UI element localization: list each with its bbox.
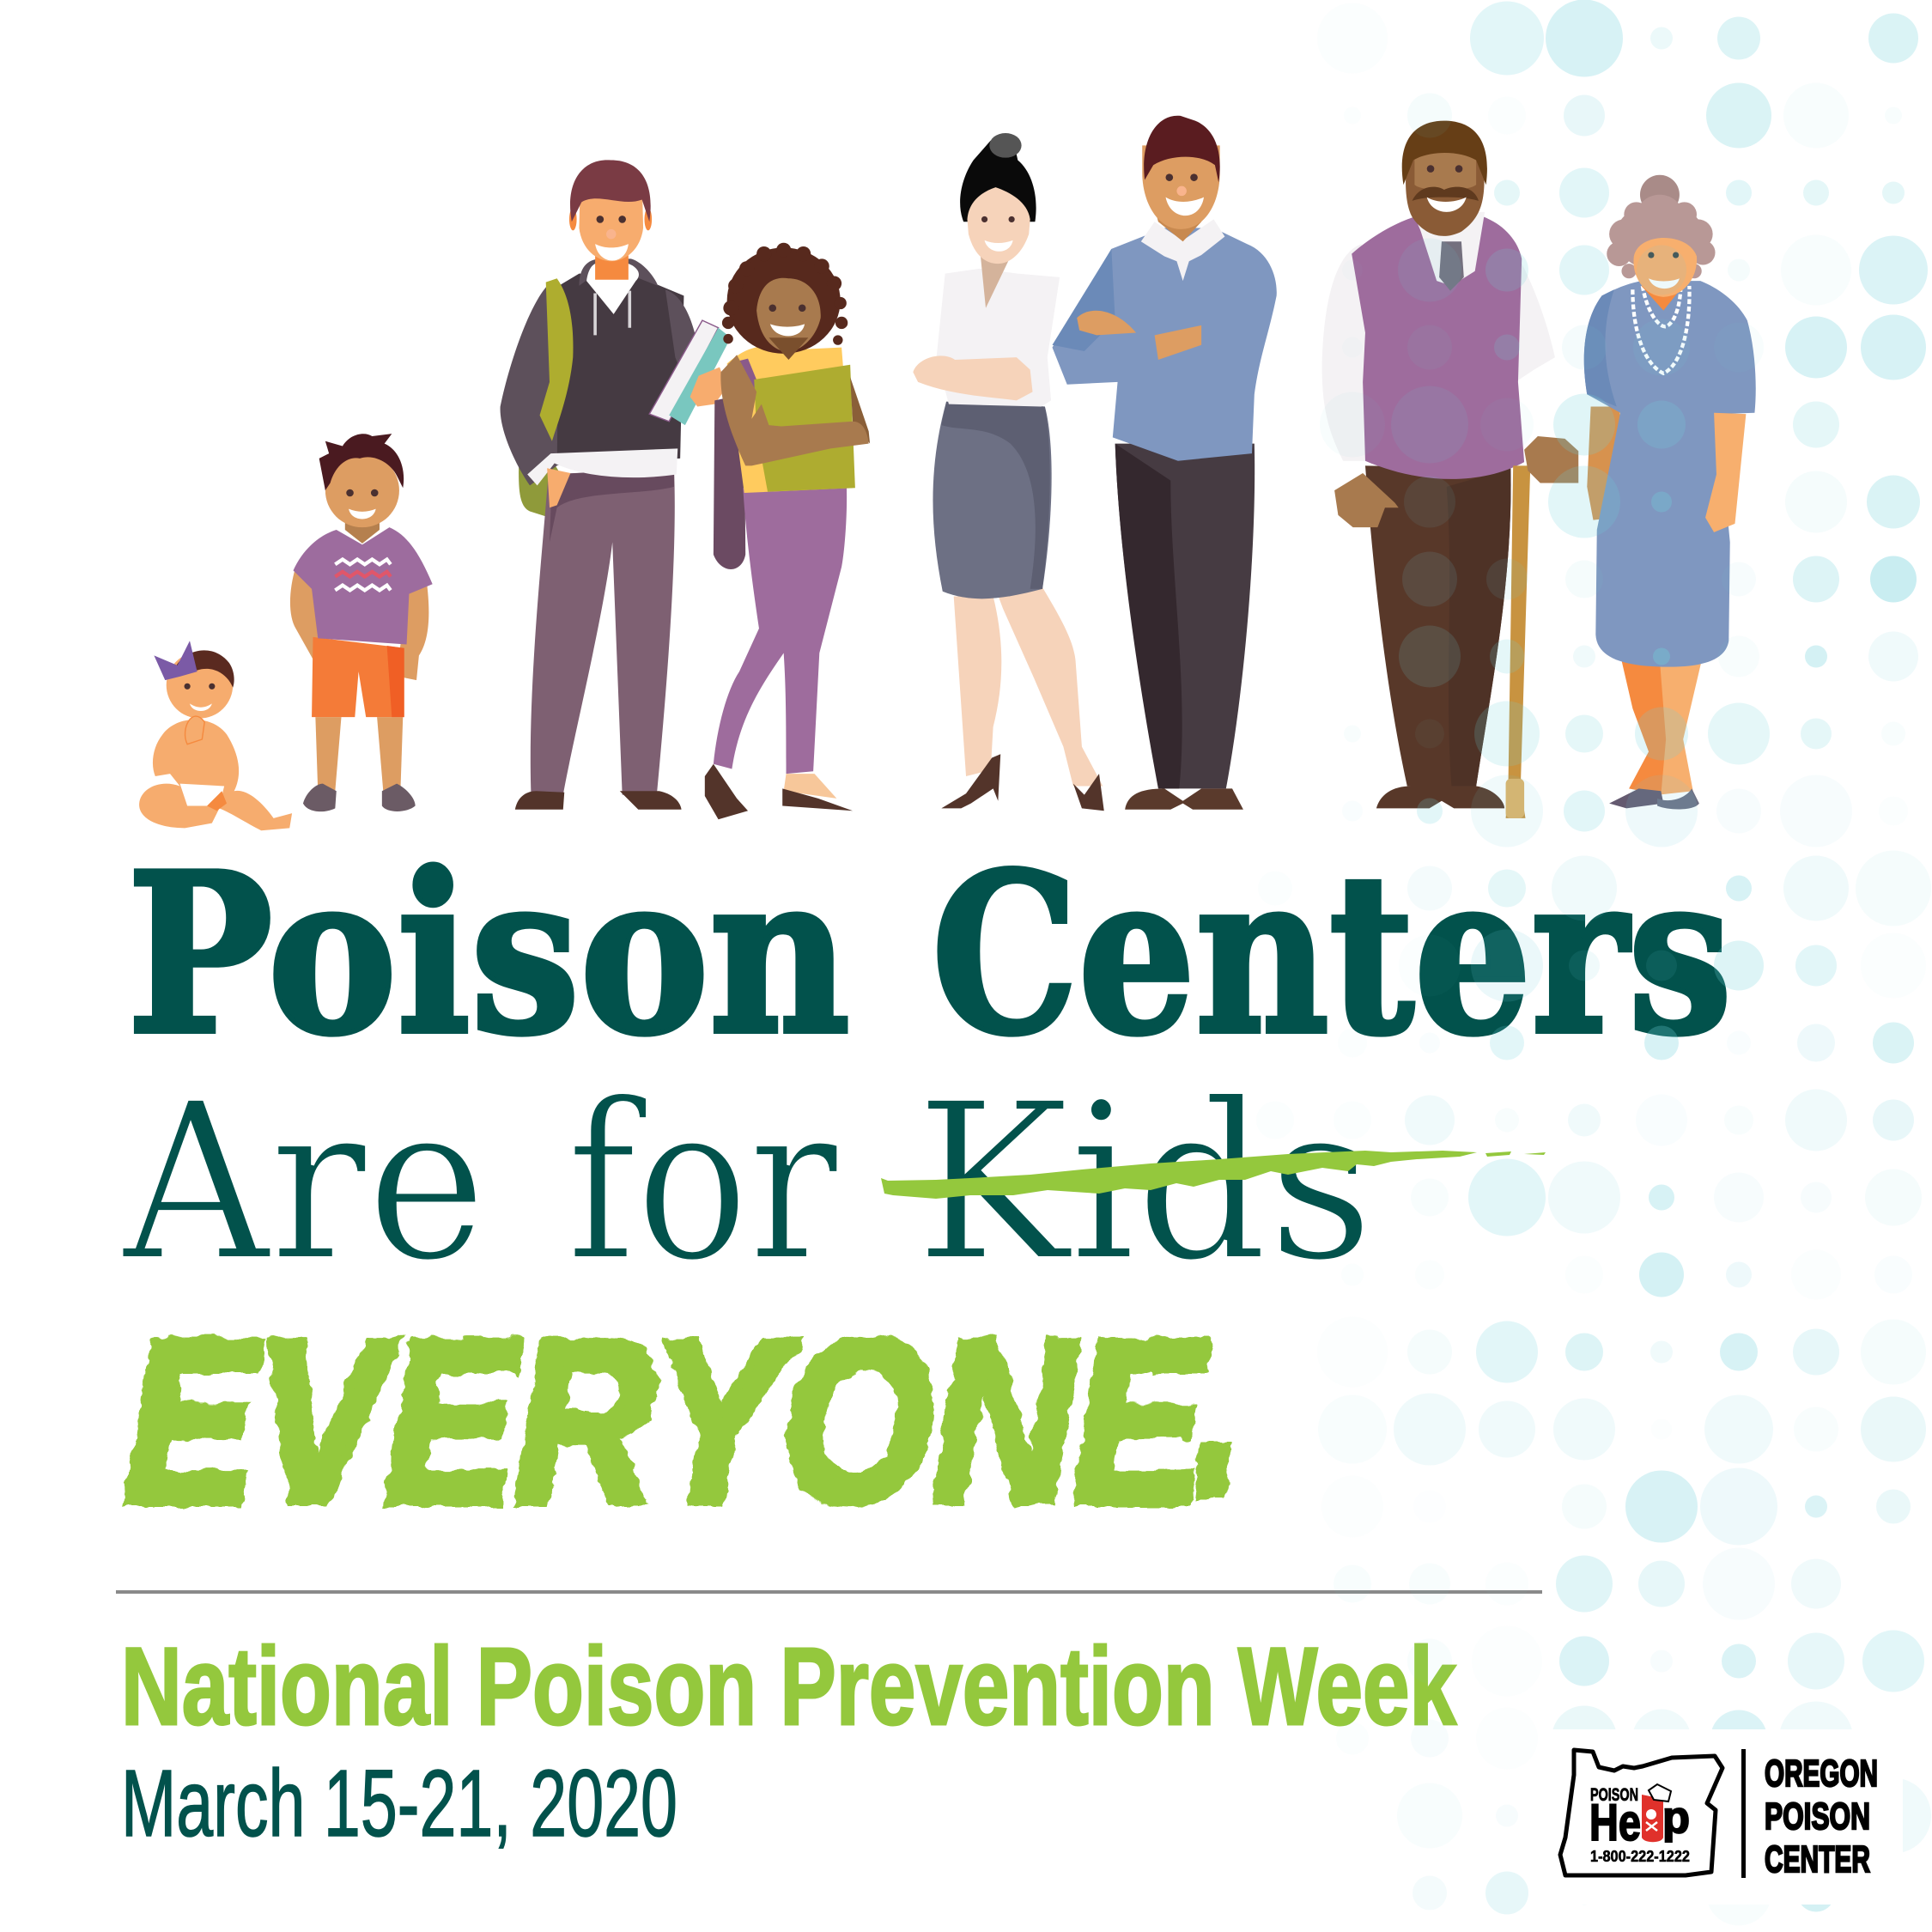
tagline: EVERYONE.: . [1189,1158,1249,1580]
illustration: people of all ages [139,116,1756,830]
figure: baby [139,641,292,830]
logo: Oregon Poison Center [1551,1729,1903,1905]
tagline: EVERYONE.: EVERYONE [125,1292,1210,1550]
poison help text: p [1662,1793,1690,1843]
heading: Are for Kids: Kids [915,1055,1374,1309]
poison help text [1589,1785,1690,1865]
poison help text: l [1647,1795,1656,1851]
title: Poison Centers: Centers [932,826,1732,1084]
organization name: CENTER [1765,1838,1870,1880]
poison help text: POISON [1590,1785,1638,1805]
poison help text: He [1589,1794,1641,1851]
title: Poison Centers: Poison [127,826,850,1084]
icon: red poison bottle [1642,1784,1671,1842]
divider line [116,1590,1542,1594]
figure: older man with cane [1322,121,1578,818]
organization name: POISON [1765,1795,1870,1838]
tagline: EVERYONE. [125,1158,1249,1580]
figure: grandmother with pearls [1584,175,1756,809]
poison help text: 1-800-222-1222 [1590,1848,1690,1865]
figure: man in blue sweater [1052,116,1277,810]
heading: Are for Kids [121,1055,1374,1309]
organization name: OREGON [1765,1753,1878,1795]
organization name [1765,1753,1878,1880]
figure: office woman [913,133,1104,811]
figure: teen boy with hoodie and books [501,160,731,810]
separator [1741,1749,1746,1878]
icon: Oregon state outline [1560,1750,1722,1875]
title: Poison Centers [127,826,1732,1084]
heading: National Poison Prevention Week: National Poison Prevention Week [121,1625,1457,1748]
figure: boy [290,434,433,811]
date: March 15-21, 2020: March 15-21, 2020 [121,1751,677,1856]
strike-through brush stroke [881,1151,1546,1199]
background dot pattern [1256,0,1931,1925]
heading: Are for Kids: for [567,1055,838,1309]
heading: Are for Kids: Are [121,1055,487,1309]
figure: teen girl with binder [705,243,870,819]
